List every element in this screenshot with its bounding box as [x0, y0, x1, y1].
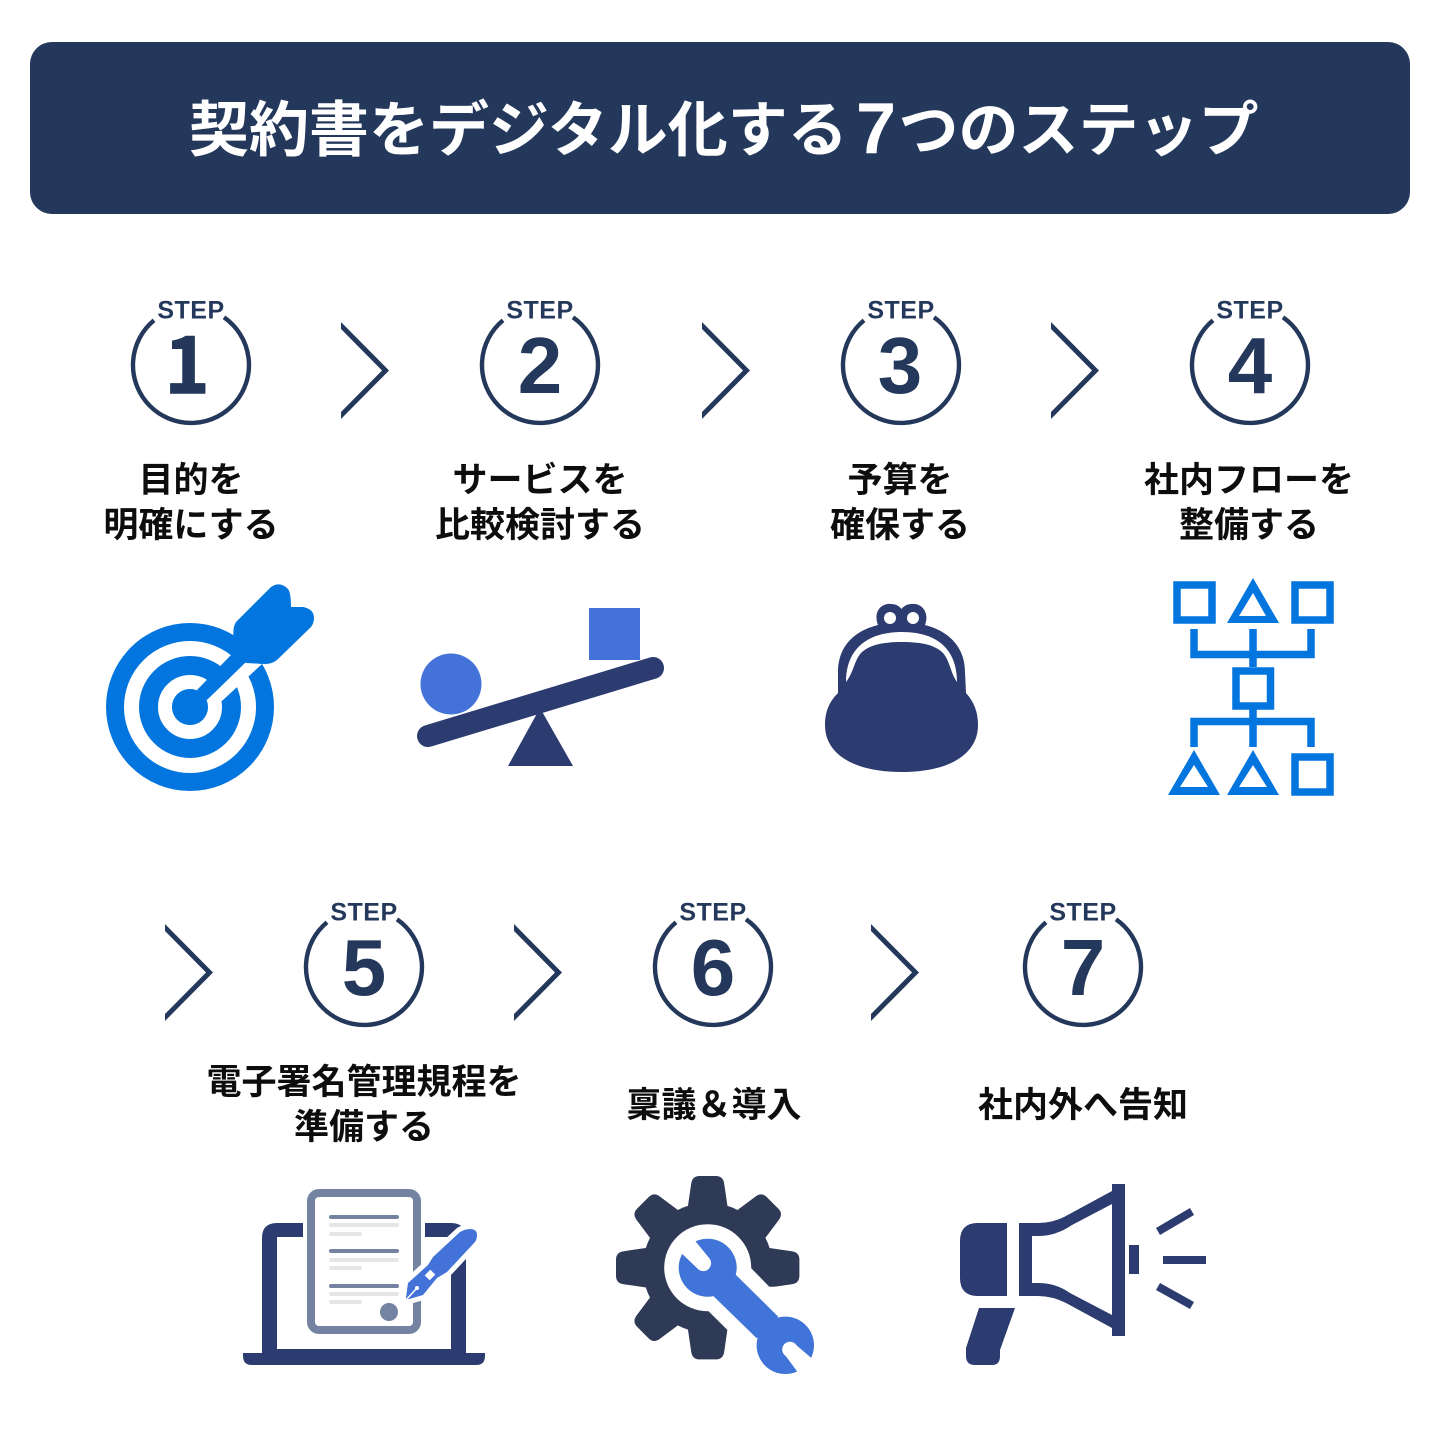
icon: gear with wrench — [616, 1176, 830, 1380]
arrow 5 to 6 — [514, 924, 562, 1021]
arrow before step 5 — [165, 924, 213, 1021]
step 3 badge: STEP — [867, 296, 935, 324]
step 2 badge: STEP — [506, 296, 574, 324]
title banner: 契約書をデジタル化する — [189, 82, 848, 169]
step 3 label: 確保する — [830, 497, 970, 548]
step 5 label: 準備する — [294, 1099, 434, 1150]
title banner: つのステップ — [898, 82, 1258, 169]
step 6 badge: STEP — [679, 898, 747, 926]
step 1 badge: STEP — [157, 296, 225, 324]
step 5 badge: 5 — [342, 923, 386, 1012]
step 3 badge — [843, 296, 959, 423]
step 6 badge — [655, 898, 771, 1025]
icon: seesaw — [420, 608, 653, 766]
title banner: 7 — [856, 89, 896, 169]
icon: megaphone — [960, 1184, 1206, 1365]
step 7 label: 社内外へ告知 — [978, 1077, 1188, 1128]
step 6 label: 稟議＆導入 — [626, 1077, 802, 1128]
step 3 badge: 3 — [878, 321, 922, 410]
step 1 label: 目的を — [138, 452, 244, 503]
step 2 badge — [482, 296, 598, 423]
step 7 badge — [1025, 898, 1141, 1025]
step 6 badge: 6 — [691, 923, 735, 1012]
icon: target with arrow — [115, 584, 314, 782]
step 7 badge: 7 — [1061, 923, 1105, 1012]
step 4 badge: STEP — [1216, 296, 1284, 324]
step 4 badge — [1192, 296, 1308, 423]
step 5 badge — [306, 898, 422, 1025]
step 1 badge: 1 — [165, 305, 209, 415]
arrow 6 to 7 — [871, 924, 919, 1021]
icon: laptop with signed document — [243, 1185, 485, 1365]
step 2 label: 比較検討する — [435, 497, 645, 548]
step 1 label: 明確にする — [103, 497, 279, 548]
title banner — [30, 42, 1410, 214]
step 5 badge: STEP — [330, 898, 398, 926]
step 3 label: 予算を — [847, 452, 953, 503]
step 7 badge: STEP — [1049, 898, 1117, 926]
arrow 2 to 3 — [702, 322, 750, 419]
step 1 badge — [133, 296, 249, 423]
step 4 badge: 4 — [1228, 321, 1273, 410]
icon: coin purse — [825, 604, 978, 772]
step 4 label: 整備する — [1179, 497, 1319, 548]
icon: org flow chart — [1168, 578, 1330, 795]
arrow 1 to 2 — [341, 322, 389, 419]
step 5 label: 電子署名管理規程を — [206, 1054, 522, 1105]
step 2 badge: 2 — [518, 321, 562, 410]
step 2 label: サービスを — [452, 452, 628, 503]
arrow 3 to 4 — [1051, 322, 1099, 419]
step 4 label: 社内フローを — [1144, 452, 1354, 503]
